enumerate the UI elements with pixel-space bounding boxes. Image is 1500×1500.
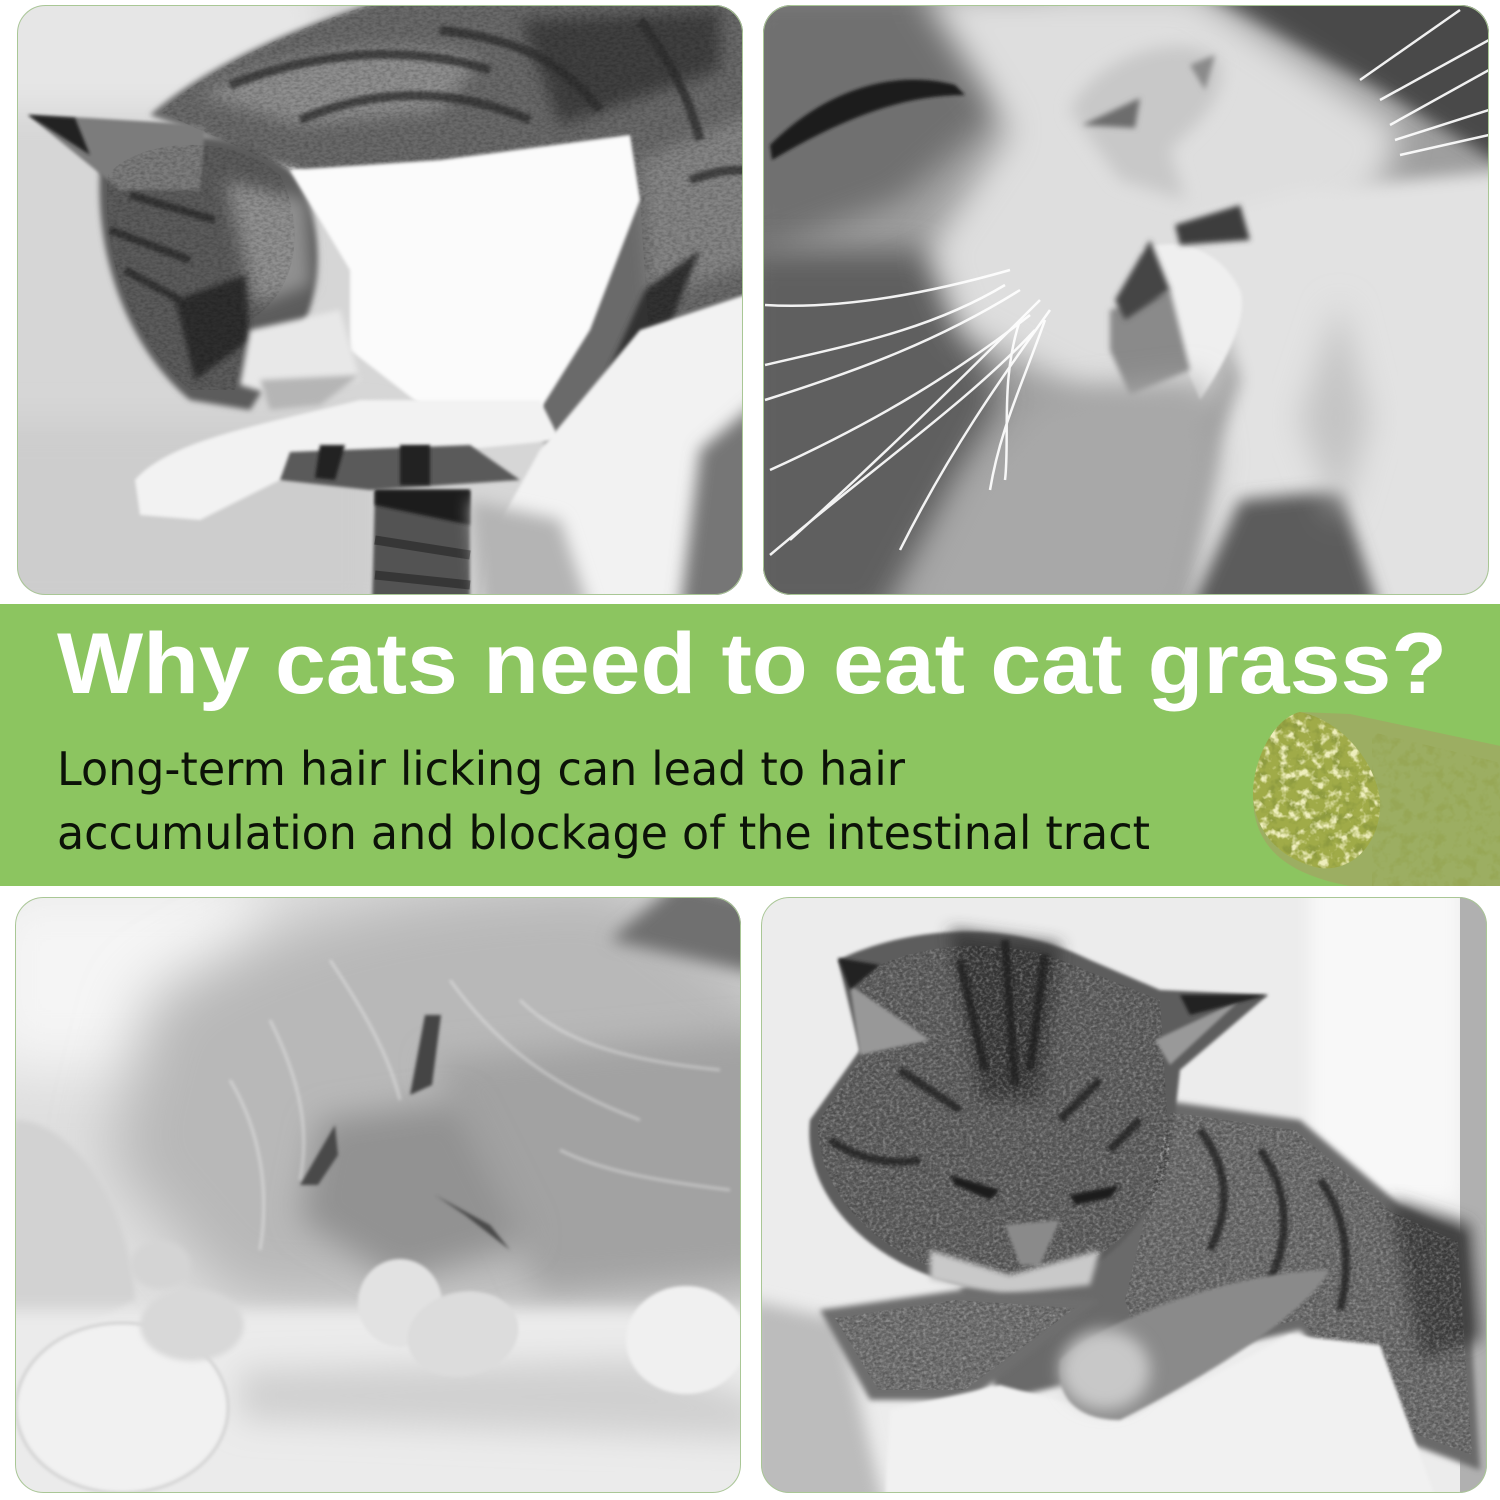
text: explanation of hair licking: Long-term hair licking can lead to hair	[57, 742, 905, 796]
whiskers	[765, 10, 1489, 555]
photo: tabby cat resting on a white perch	[750, 880, 1500, 1500]
text: explanation of hair licking: accumulation and blockage of the intestinal tract	[57, 806, 1150, 860]
photo: cat biting its paw, close-up	[740, 0, 1500, 620]
icon: cat grass stick	[1253, 712, 1500, 890]
photo: cat licking its paw	[17, 5, 743, 595]
photo: fluffy cat sleeping among felt balls	[15, 897, 741, 1493]
banner: green band	[0, 604, 1500, 886]
text: explanation of hair licking	[57, 742, 1150, 860]
heading: why cats need cat grass: Why cats need to eat cat grass?	[57, 616, 1447, 712]
